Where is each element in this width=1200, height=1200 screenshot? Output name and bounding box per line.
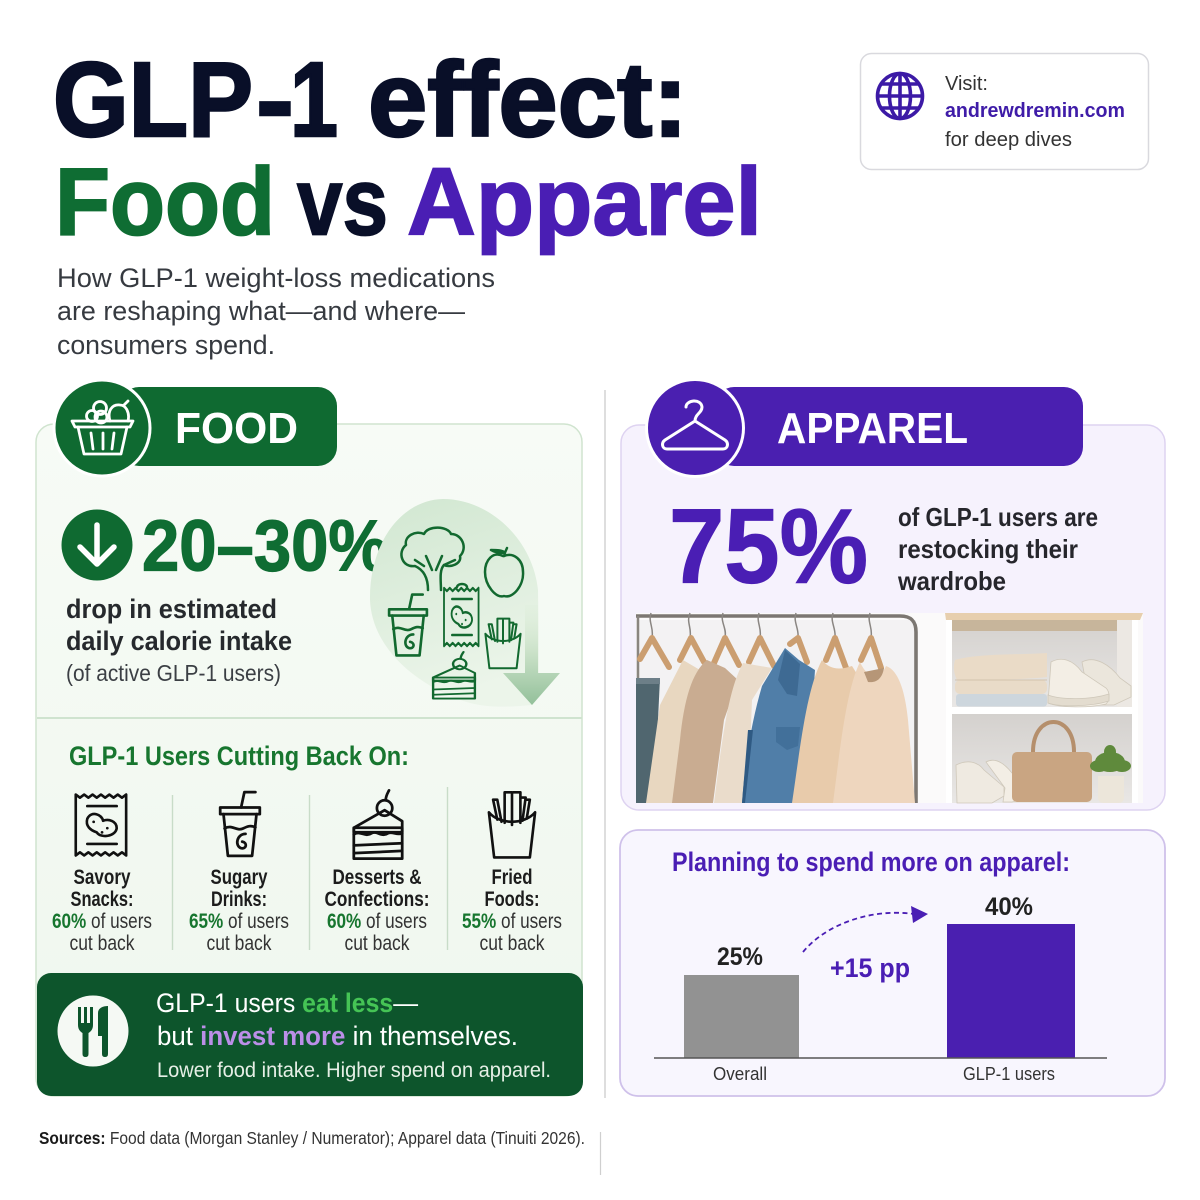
heading: cutting back: GLP-1 Users Cutting Back On: xyxy=(69,741,409,771)
bar: GLP-1 users: GLP-1 users xyxy=(963,1064,1055,1084)
icon: fries xyxy=(489,792,535,857)
subtitle: How GLP-1 weight-loss medications xyxy=(57,263,495,293)
heading: food: FOOD xyxy=(175,404,298,453)
icon: cake xyxy=(354,790,402,859)
heading: apparel xyxy=(645,378,1083,478)
icon: fork and knife xyxy=(58,996,128,1066)
divider between panels xyxy=(600,390,605,1175)
callout: takeaway banner xyxy=(37,973,583,1096)
item: sugary drinks: Sugary xyxy=(210,866,268,889)
item: sugary drinks: Drinks: xyxy=(211,888,267,911)
sources: Sources: Food data (Morgan Stanley / Numerator); Apparel data (Tinuiti 2026). xyxy=(39,1128,585,1148)
item: sugary drinks xyxy=(189,792,289,955)
title: GLP xyxy=(53,41,253,159)
item: fried foods: Fried xyxy=(492,866,532,889)
panel: food xyxy=(36,378,583,1096)
item: desserts: Desserts & xyxy=(332,866,422,889)
callout: takeaway banner: GLP-1 users eat less— xyxy=(156,988,418,1018)
icon: cup xyxy=(220,792,260,856)
panel: spending chart xyxy=(620,830,1165,1096)
title: 1 xyxy=(290,41,338,159)
icon group: food falling with down arrow xyxy=(370,499,560,707)
shoes xyxy=(956,659,1131,803)
text: calorie description xyxy=(66,594,292,686)
title xyxy=(53,41,762,256)
bar: GLP-1 users: 40% xyxy=(985,893,1033,921)
arrow: increase xyxy=(803,906,928,952)
heading: food xyxy=(52,378,337,478)
item: desserts: cut back xyxy=(344,932,410,955)
text: calorie description: drop in estimated xyxy=(66,594,277,624)
title: vs xyxy=(297,148,388,256)
shelf unit xyxy=(946,618,1138,803)
title: Apparel xyxy=(407,148,762,256)
item: savory snacks: Snacks: xyxy=(70,888,134,911)
item: fried foods: cut back xyxy=(480,932,545,955)
bar: GLP-1 users xyxy=(947,893,1075,1084)
icon: globe xyxy=(878,74,922,118)
callout: visit website: andrewdremin.com xyxy=(945,99,1125,122)
stat: calorie drop: 20–30% xyxy=(142,506,388,586)
item: savory snacks xyxy=(52,795,152,955)
item: fried foods xyxy=(462,792,562,955)
title: effect: xyxy=(368,41,688,159)
bar: overall xyxy=(684,943,799,1084)
item: savory snacks: Savory xyxy=(74,866,131,889)
item: fried foods: Foods: xyxy=(484,888,540,911)
label: +15 pp: +15 pp xyxy=(830,953,910,983)
title: - xyxy=(256,41,294,159)
item: sugary drinks: cut back xyxy=(206,932,272,955)
text: restocking: restocking their xyxy=(898,534,1078,564)
panel: apparel xyxy=(621,378,1165,810)
icon: down arrow xyxy=(62,510,132,580)
callout: visit website: for deep dives xyxy=(945,128,1072,151)
image: clothing rack and shelves xyxy=(636,613,1143,803)
item: desserts: 60% of users xyxy=(327,910,427,933)
item: desserts xyxy=(324,790,430,955)
item: savory snacks: 60% of users xyxy=(52,910,152,933)
subtitle: are reshaping what—and where— xyxy=(57,296,465,326)
callout: visit website xyxy=(860,54,1148,170)
text: calorie description: daily calorie intake xyxy=(66,626,292,656)
text: calorie description: (of active GLP-1 users) xyxy=(66,660,281,686)
text: restocking xyxy=(897,502,1098,596)
subtitle: consumers spend. xyxy=(57,330,275,360)
bar: overall: 25% xyxy=(717,943,763,971)
title: Food xyxy=(55,148,275,256)
callout: takeaway banner: but invest more in themselves. xyxy=(157,1021,518,1051)
text: restocking: wardrobe xyxy=(897,566,1006,596)
stat: 75%: 75% xyxy=(669,488,868,606)
heading: apparel: APPAREL xyxy=(777,404,968,453)
text: restocking: of GLP-1 users are xyxy=(898,502,1098,532)
hangers xyxy=(650,613,871,637)
item: fried foods: 55% of users xyxy=(462,910,562,933)
callout: takeaway banner: Lower food intake. Higher spend on apparel. xyxy=(157,1058,551,1082)
chart heading: Planning to spend more on apparel: xyxy=(672,847,1070,877)
callout: visit website: Visit: xyxy=(945,73,988,95)
subtitle xyxy=(57,263,495,360)
item: savory snacks: cut back xyxy=(70,932,135,955)
item: sugary drinks: 65% of users xyxy=(189,910,289,933)
bar: overall: Overall xyxy=(713,1064,767,1084)
item: desserts: Confections: xyxy=(324,888,430,911)
icon: chips bag xyxy=(76,795,126,855)
